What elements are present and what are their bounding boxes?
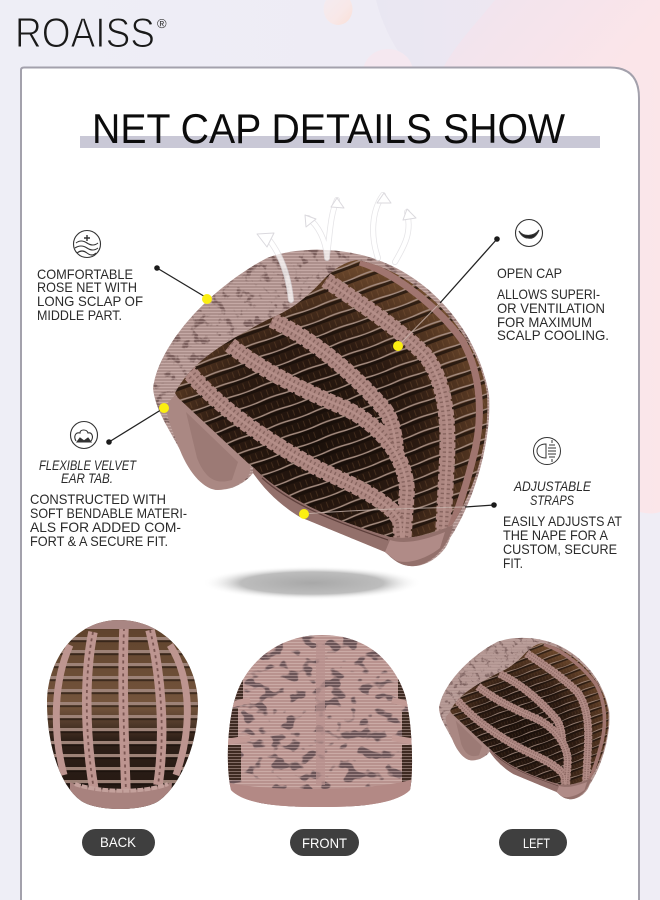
title: NET CAP DETAILS SHOW: NET CAP DETAILS SHOW [92,105,565,152]
text: open cap: FOR MAXIMUM [497,315,592,330]
text: rose net: LONG SCLAP OF [37,294,143,309]
label: BACK [82,829,155,856]
icon: adjustable straps [534,438,560,464]
label: LEFT [499,829,567,856]
ear tab [166,395,250,490]
open hair area [150,240,495,550]
text: adjustable straps: THE NAPE FOR A [503,528,609,543]
shadow under main cap [202,566,422,600]
text: open cap [497,266,609,343]
text: adjustable straps [503,479,622,571]
front view cap [225,632,418,810]
text: open cap: OPEN CAP [497,266,562,281]
text: open cap: ALLOWS SUPERI- [497,287,600,302]
icon: cotton velvet [70,422,98,448]
logo: ROAISS: ROAISS [15,9,155,56]
text: adjustable straps: FIT. [503,556,523,571]
text: velvet ear tab: ALS FOR ADDED COM- [30,520,181,535]
text: velvet ear tab: FORT & A SECURE FIT. [30,534,168,549]
lace flower patches [225,632,417,810]
label: FRONT: FRONT [302,835,347,851]
text: rose net: COMFORTABLE [37,267,133,282]
icon: rose net [74,230,100,258]
text: rose net [37,267,143,323]
back view cap [45,618,201,815]
icon: open cap [516,220,542,246]
text: adjustable straps: STRAPS [530,493,574,508]
text: open cap: OR VENTILATION [497,301,605,316]
text: velvet ear tab [30,458,187,549]
text: velvet ear tab: SOFT BENDABLE MATERI- [30,506,187,521]
text: velvet ear tab: FLEXIBLE VELVET [39,458,137,473]
label: FRONT [290,829,359,856]
label: LEFT: LEFT [523,835,550,851]
lace crown and silhouette [150,245,495,570]
text: velvet ear tab: CONSTRUCTED WITH [30,492,166,507]
text: adjustable straps: ADJUSTABLE [513,479,592,494]
main wig cap [150,240,495,570]
text: velvet ear tab: EAR TAB. [61,471,113,486]
label: BACK: BACK [100,834,137,850]
text: rose net: MIDDLE PART. [37,308,122,323]
left view cap [437,633,612,801]
text: open cap: SCALP COOLING. [497,328,609,343]
text: adjustable straps: CUSTOM, SECURE [503,542,617,557]
logo: ROAISS: ® [157,16,167,31]
bottom rim and strap [253,467,453,566]
text: adjustable straps: EASILY ADJUSTS AT [503,514,622,529]
side hair strips [228,679,412,783]
lace strips [186,262,479,545]
text: rose net: ROSE NET WITH [37,280,137,295]
leader lines and yellow callout dots [106,236,500,519]
airflow arrows [257,193,416,300]
